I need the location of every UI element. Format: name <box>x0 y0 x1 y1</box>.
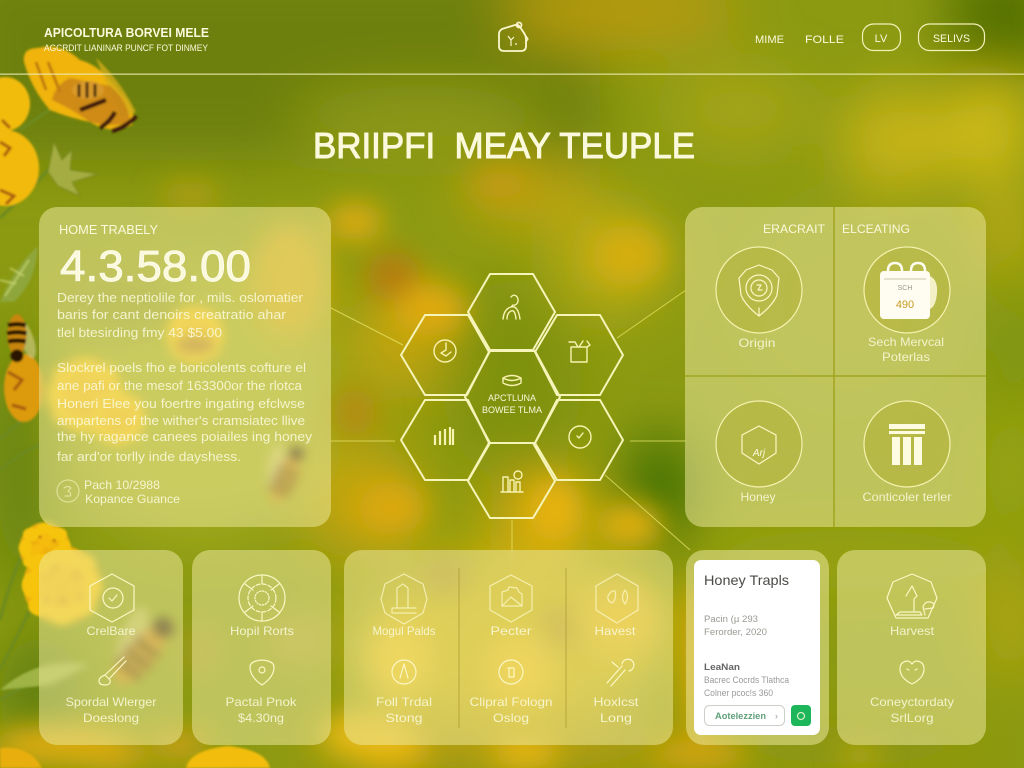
label: Spordal Wlerger <box>66 695 157 709</box>
panel heading: HOME TRABELY <box>59 223 159 237</box>
label: Mogul Palds <box>372 624 436 638</box>
card action icon <box>791 705 811 726</box>
body text: far ard'or torlly inde dayshess. <box>57 450 241 464</box>
icon: origin shield <box>716 247 802 333</box>
nav links: MIME <box>755 34 784 46</box>
panel: right icon grid <box>685 207 986 527</box>
body text: ane pafi or the mesof 163300or the rlotca <box>57 379 302 393</box>
intro text: tlel btesirding fmy 43 $5.00 <box>57 326 222 340</box>
card location: LeaNan <box>704 662 740 672</box>
brand subtitle: AGCRDIT LIANINAR PUNCF FOT DINMEY <box>44 43 209 54</box>
footer note: Kopance Guance <box>85 492 180 506</box>
footer note: Pach 10/2988 <box>84 478 160 492</box>
nav links: FOLLE <box>805 34 844 46</box>
label <box>470 695 552 725</box>
icon: compass <box>392 660 416 684</box>
icon: heptagon spade <box>887 574 937 618</box>
card dates <box>704 614 767 638</box>
body text: Slockrel poels fho e boricolents cofture el <box>57 361 306 375</box>
nav pill: LV <box>862 24 900 50</box>
bottom flower <box>186 746 270 768</box>
label: CrelBare <box>86 624 136 638</box>
column headings: ERACRAIT <box>763 222 826 236</box>
panel: top navigation header <box>0 22 1024 75</box>
label <box>226 695 298 725</box>
column headings <box>763 222 910 236</box>
icon: jar circle <box>499 660 523 684</box>
card dates: Ferorder, 2020 <box>704 627 767 638</box>
label: Clipral Fologn <box>470 695 552 709</box>
label: Harvest <box>890 624 935 638</box>
label <box>870 695 954 725</box>
label: Coneyctordaty <box>870 695 954 709</box>
nav links <box>755 34 844 46</box>
panel: home trabely summary <box>39 207 331 527</box>
label: Pecter <box>490 624 532 638</box>
label: bag: Sech Mervcal <box>868 335 944 349</box>
body text: the hy ragance canees poiailes ing honey <box>57 430 313 444</box>
nav pill: SELIVS <box>918 24 984 50</box>
hexagon: lower left <box>401 400 489 480</box>
label: Long <box>600 711 632 725</box>
panel: bottom card 2 <box>192 550 331 745</box>
icon: bag <box>864 247 950 333</box>
card heading: Honey Trapls <box>704 572 789 588</box>
icon: hexagon check <box>90 574 134 622</box>
label: Doeslong <box>83 711 139 725</box>
label: bag: Poterlas <box>882 350 930 364</box>
label <box>66 695 157 725</box>
connector lines <box>331 290 690 562</box>
big number: 4.3.58.00 <box>60 242 251 291</box>
panel: honey traps card holder <box>686 550 829 745</box>
footer note <box>84 478 180 506</box>
label: columns: Conticoler terler <box>862 490 952 504</box>
label <box>594 695 639 725</box>
label: Stong <box>386 711 422 725</box>
flowers and bees on left edge <box>0 46 270 768</box>
body text: Honeri Elee you foertre ingating efclwse <box>57 397 305 411</box>
label: Oslog <box>493 711 529 725</box>
label: SrlLorg <box>890 711 934 725</box>
label: Havest <box>594 624 636 638</box>
card location: Bacrec Cocrds Tlathca <box>704 675 789 685</box>
icon: heart <box>900 661 924 684</box>
label: honey: Honey <box>740 490 776 504</box>
label: Foll Trdal <box>376 695 432 709</box>
hexagon: upper right <box>535 315 623 395</box>
column headings: ELCEATING <box>842 222 910 236</box>
icon: bag: 490 <box>896 299 914 311</box>
icon: honey rosette <box>239 575 285 621</box>
hexagon: center <box>465 351 560 443</box>
hexagon: center: BOWEE TLMA <box>482 405 543 416</box>
icon: parcel <box>490 575 532 622</box>
label: Hopil Rorts <box>230 624 294 638</box>
icon: jar logo <box>499 22 528 51</box>
brand title: APICOLTURA BORVEI MELE <box>44 26 209 40</box>
body text: ampartens of the wither's cramsiatec llive <box>57 414 305 428</box>
hexagon: bottom <box>468 443 555 518</box>
panel: bottom card 3 with six items <box>344 550 673 745</box>
icon: columns <box>864 401 950 487</box>
label: origin: Origin <box>738 336 776 350</box>
title: BRIIPFI MEAY TEUPLE <box>313 125 695 166</box>
icon: honey hexagon: Arj <box>752 448 766 459</box>
label <box>376 695 432 725</box>
icon: pin <box>250 660 274 685</box>
label: bag <box>868 335 944 364</box>
icon: leaves <box>596 574 638 623</box>
intro text <box>57 291 303 340</box>
intro text: Derey the neptiolile for , mils. oslomatier <box>57 291 303 305</box>
flowers behind panels <box>46 306 310 692</box>
icon: honey hexagon <box>716 401 802 487</box>
icon: bag: SCH <box>898 285 912 292</box>
body text <box>57 361 313 464</box>
card location <box>704 662 789 698</box>
nav pill: SELIVS: SELIVS <box>933 33 970 45</box>
icon: wrench <box>99 657 126 685</box>
nav pill: LV: LV <box>875 33 888 45</box>
hexagon: center: APCTLUNA <box>488 393 537 404</box>
label: $4.30ng <box>238 711 284 725</box>
icon: monument <box>381 574 427 624</box>
card dates: Pacin (µ 293 <box>704 614 758 625</box>
icon: footer badge <box>57 480 79 502</box>
card location: Colner pcoc!s 360 <box>704 688 773 698</box>
panel: bottom card 5 <box>837 550 986 745</box>
label: Pactal Pnok <box>226 695 298 709</box>
panel: bottom card 1 <box>39 550 183 745</box>
card: white details <box>694 560 820 735</box>
label: Hoxlcst <box>594 695 639 709</box>
hexagon: upper left <box>401 315 489 395</box>
hexagon: lower right <box>535 400 623 480</box>
mid blurred flowers <box>0 171 878 768</box>
card button <box>704 706 784 726</box>
intro text: baris for cant denoirs creatratio ahar <box>57 308 286 322</box>
hexagon: top <box>468 274 555 350</box>
card button: Aotelezzien <box>715 711 766 722</box>
card button: › <box>775 711 778 721</box>
icon: tool <box>607 659 634 686</box>
